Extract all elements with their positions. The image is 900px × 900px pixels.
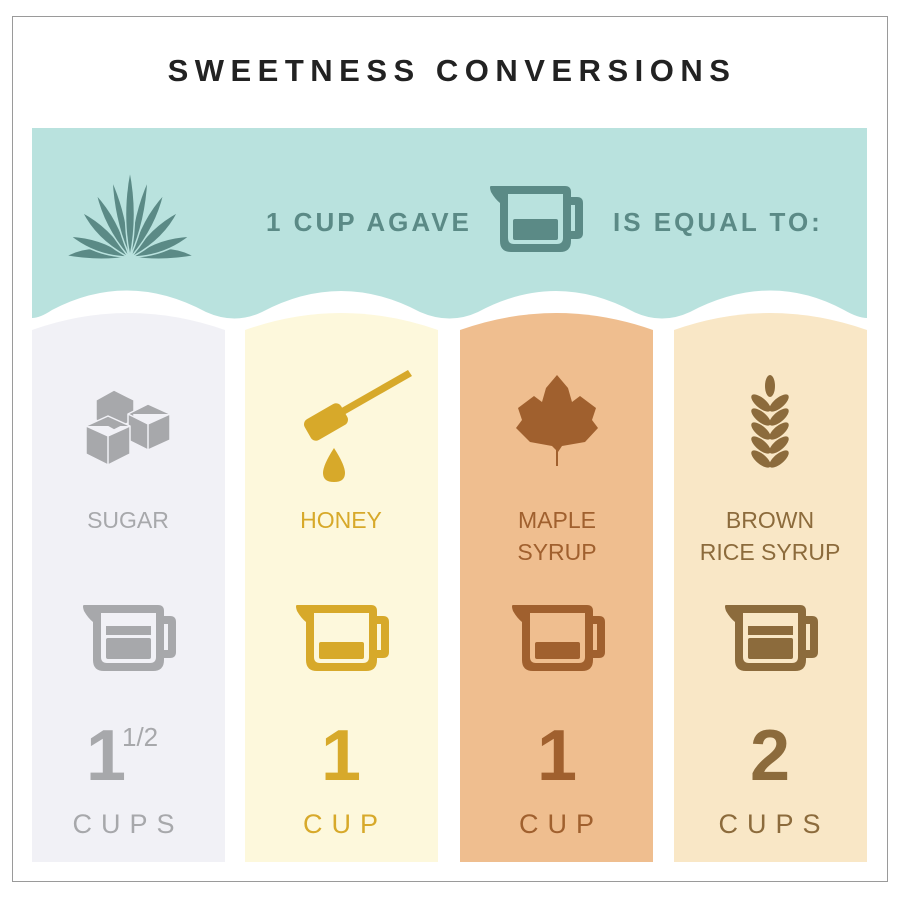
- column: sugar: [32, 313, 225, 862]
- icon: brown rice cup: [725, 605, 818, 671]
- column: brown rice: [674, 313, 867, 862]
- amount: sugar: [86, 716, 158, 796]
- unit: honey: CUP: [303, 809, 387, 839]
- icon: honey cup: [296, 605, 389, 671]
- label: honey: HONEY: [300, 507, 382, 533]
- icon: sugar cup: [83, 605, 176, 671]
- icon: agave cup: [490, 186, 583, 252]
- icon: wheat: [749, 375, 791, 471]
- label: maple syrup: SYRUP: [517, 539, 597, 565]
- amount: honey: 1: [321, 716, 361, 796]
- icon: maple cup: [512, 605, 605, 671]
- amount: brown rice: 2: [750, 716, 790, 796]
- unit: brown rice: CUPS: [718, 809, 830, 839]
- columns: [32, 313, 867, 862]
- amount: maple: 1: [537, 716, 577, 796]
- column: maple: [460, 313, 653, 862]
- column: honey: [245, 313, 438, 862]
- icon: sugar cubes: [86, 390, 170, 465]
- label: maple syrup: MAPLE: [518, 507, 596, 533]
- icon: maple leaf: [516, 375, 598, 466]
- header band: [32, 128, 867, 318]
- icon: honey dipper: [302, 370, 412, 482]
- unit: sugar: CUPS: [72, 809, 184, 839]
- title: SWEETNESS CONVERSIONS: [168, 53, 736, 88]
- label: sugar: SUGAR: [87, 507, 169, 533]
- label: brown rice syrup: BROWN: [726, 507, 814, 533]
- label: brown rice syrup: RICE SYRUP: [700, 539, 840, 565]
- icon: agave: [66, 170, 194, 259]
- text: is equal to: IS EQUAL TO:: [613, 207, 823, 237]
- amount: sugar: 1: [86, 716, 126, 796]
- text: 1 cup agave: 1 CUP AGAVE: [266, 207, 472, 237]
- amount: sugar: 1/2: [122, 722, 158, 752]
- unit: maple: CUP: [519, 809, 603, 839]
